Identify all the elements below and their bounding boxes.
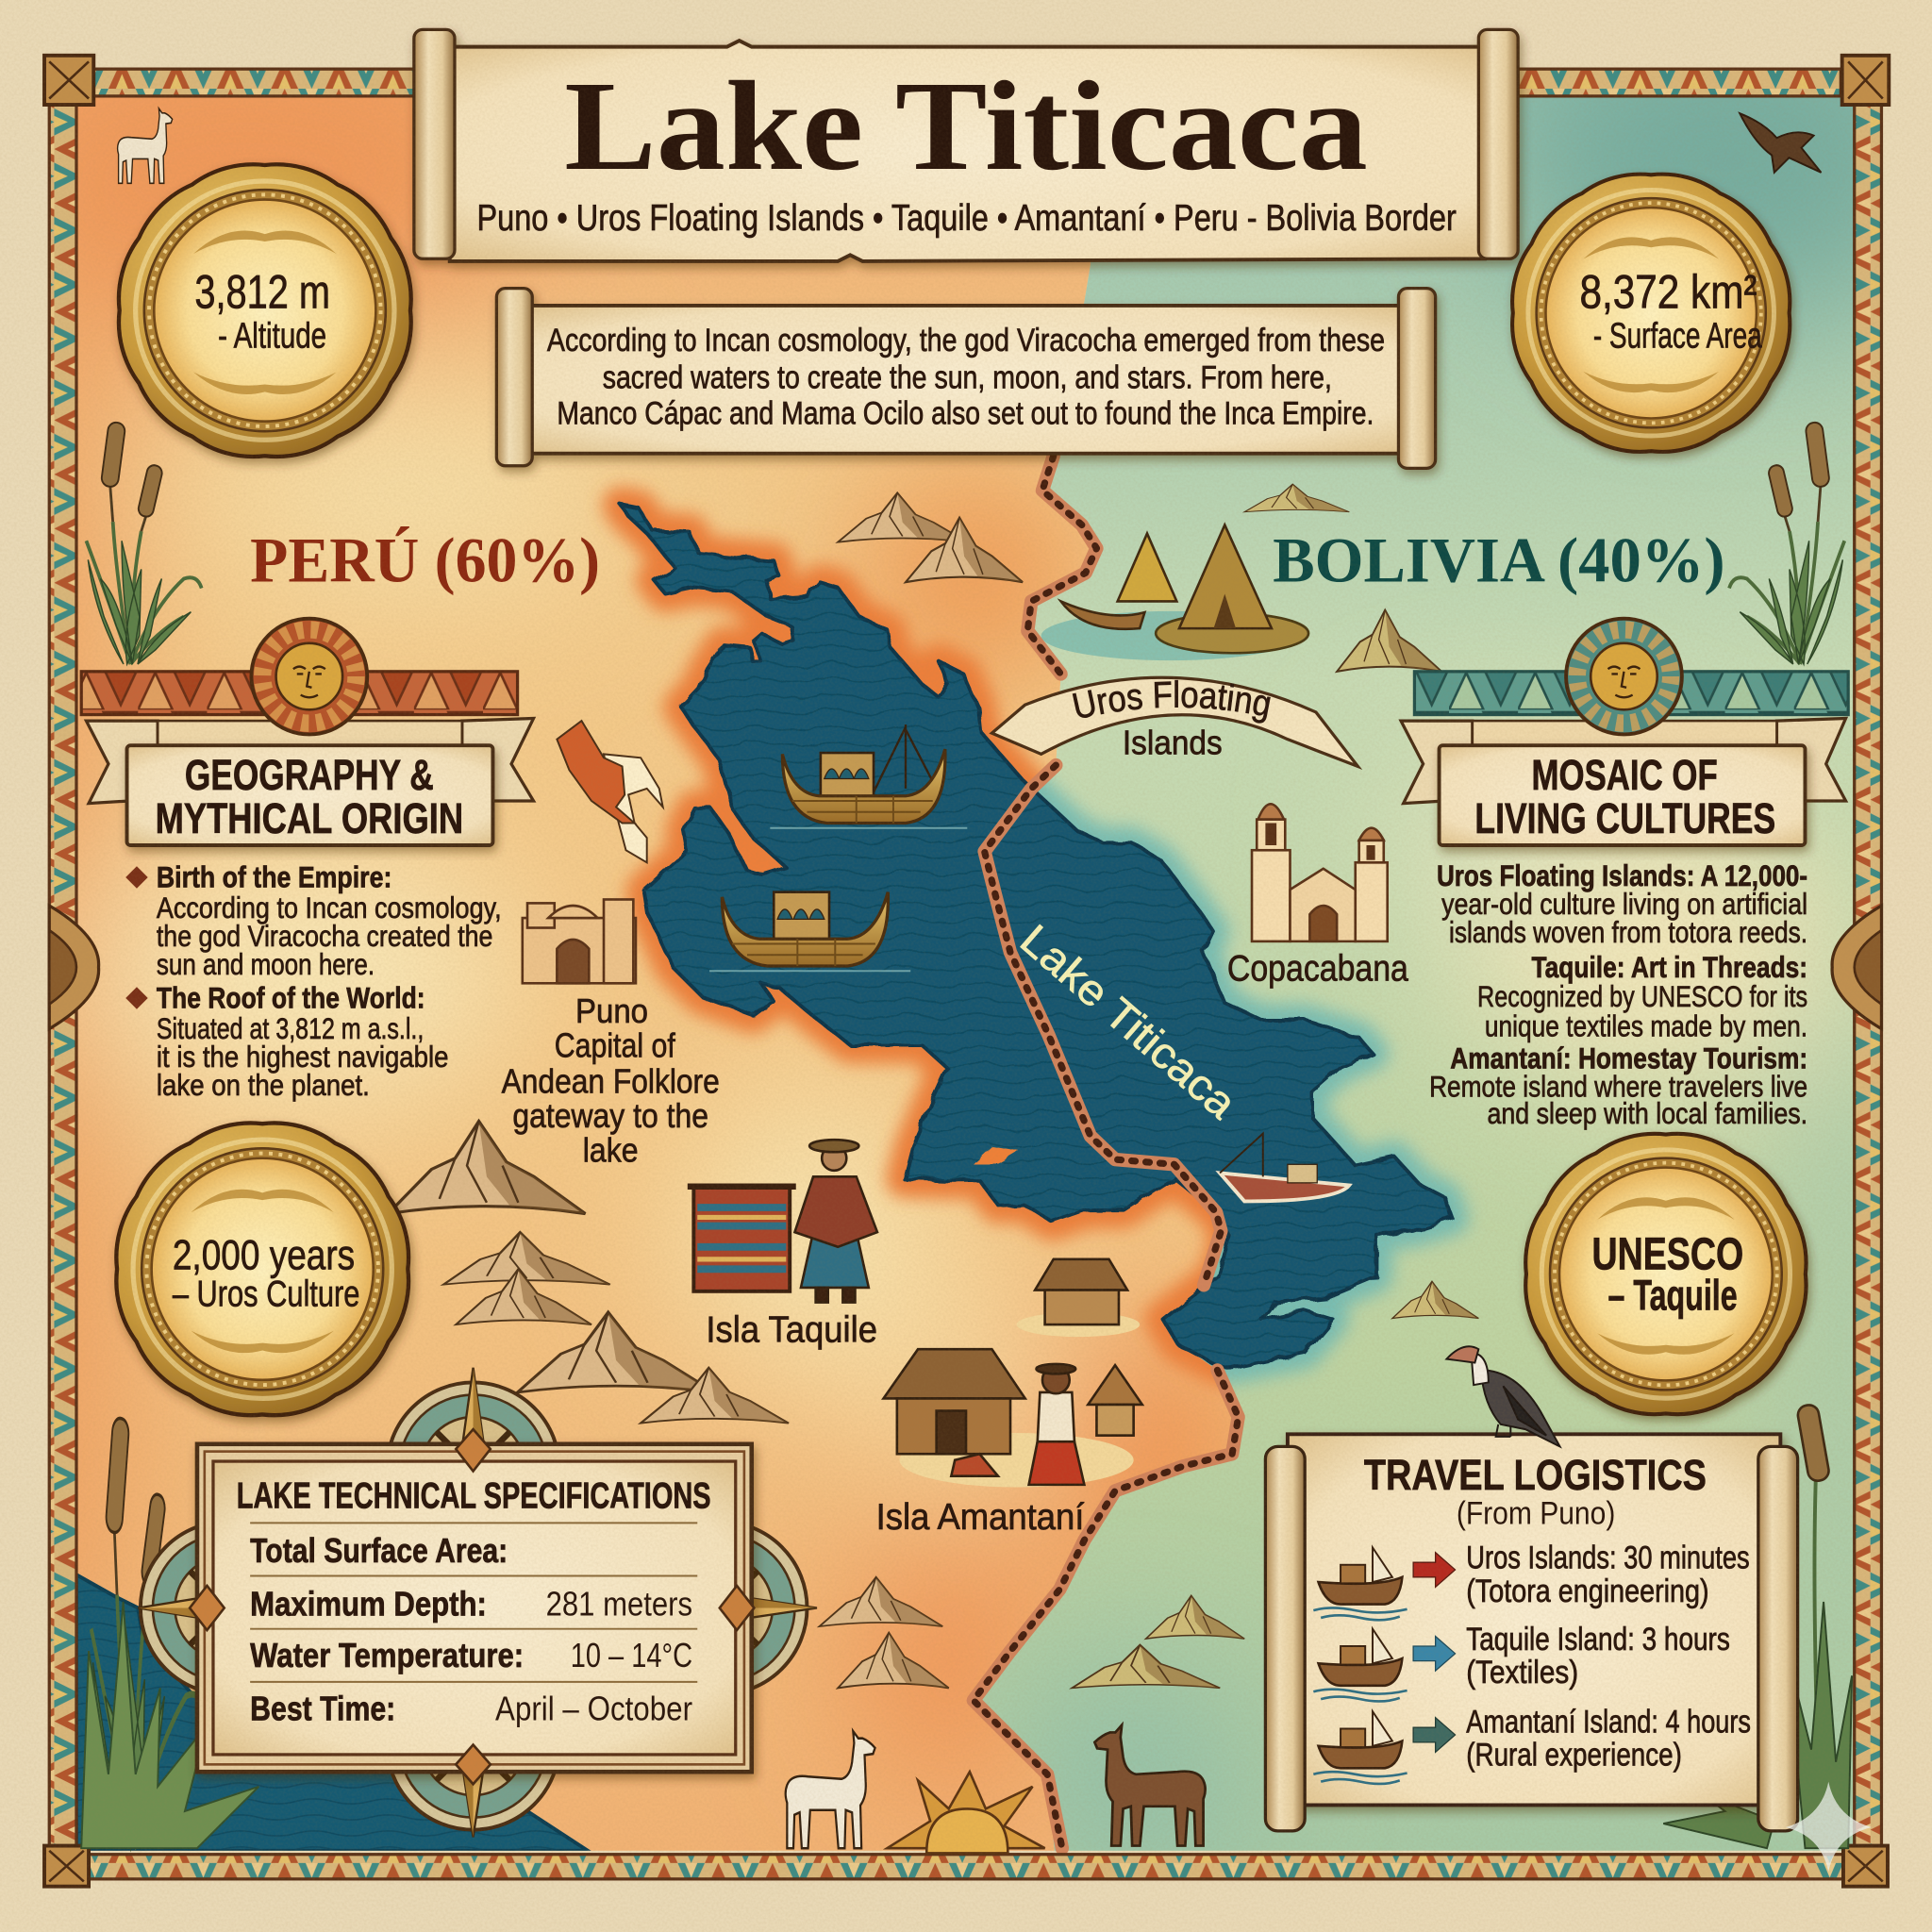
label: Puno description: Puno <box>575 991 648 1030</box>
specification rows <box>250 1531 692 1727</box>
panel header: geography <box>81 619 534 845</box>
water: southwest bay <box>76 1574 588 1851</box>
seal: surface area <box>1512 175 1790 452</box>
Peru-Bolivia dashed border <box>974 456 1239 1848</box>
icon: Taquile weaver <box>794 1140 877 1303</box>
heading: travel logistics: TRAVEL LOGISTICS <box>1364 1451 1707 1499</box>
specification rows: 281 meters <box>546 1584 692 1623</box>
subheading: (From Puno) <box>1457 1496 1615 1532</box>
icon: reed boat one <box>770 724 967 828</box>
icon: Puno colonial building <box>523 899 636 983</box>
heading line two: LIVING CULTURES <box>1474 794 1775 842</box>
label: Puno description: gateway to the <box>512 1096 708 1135</box>
text block: geography bullets: Situated at 3,812 m a.s.l., <box>157 1012 424 1045</box>
seal: Uros culture: – Uros Culture <box>173 1274 359 1314</box>
route: Amantani <box>1466 1704 1751 1774</box>
seal: UNESCO: UNESCO <box>1592 1228 1743 1279</box>
intro text <box>547 323 1385 431</box>
specification rows: 10 – 14°C <box>571 1636 692 1674</box>
icon: reed boat two <box>709 892 910 971</box>
specification rows: Total Surface Area: <box>250 1531 508 1570</box>
route: Amantani: (Rural experience) <box>1466 1738 1682 1774</box>
text block: cultures: Recognized by UNESCO for its <box>1477 980 1807 1013</box>
left roll <box>414 29 455 258</box>
ribbon: Uros Floating Islands <box>989 675 1362 770</box>
title scroll <box>414 29 1518 261</box>
route: Uros: Uros Islands: 30 minutes <box>1466 1541 1750 1576</box>
title: Lake Titicaca <box>564 56 1368 197</box>
text block: geography bullets: According to Incan cosmology, <box>157 891 502 924</box>
icon: boat to Taquile <box>1313 1629 1407 1701</box>
icon: fishing boat on lake <box>1220 1134 1349 1201</box>
label: Isla Taquile: Isla Taquile <box>706 1309 877 1350</box>
text block: geography bullets: it is the highest navigable <box>157 1041 448 1074</box>
specification rows: Best Time: <box>250 1689 395 1727</box>
icon: rising sun at the bottom <box>887 1772 1045 1853</box>
label: Puno description: Capital of <box>555 1026 675 1065</box>
route: Taquile: (Textiles) <box>1466 1655 1578 1690</box>
specification rows: April – October <box>495 1689 692 1727</box>
seal: altitude <box>119 164 411 457</box>
route: Uros <box>1466 1541 1750 1609</box>
heading: cultures: MOSAIC OF <box>1532 751 1718 799</box>
text block: cultures: and sleep with local families. <box>1487 1097 1807 1130</box>
text block: cultures: Remote island where travelers live <box>1429 1070 1807 1103</box>
heading: Bolivia: BOLIVIA (40%) <box>1273 524 1725 595</box>
reeds bottom left <box>92 1416 204 1848</box>
seal: surface area: 8,372 km² <box>1579 266 1757 319</box>
heading: geography: GEOGRAPHY & <box>185 751 434 799</box>
label: Copacabana: Copacabana <box>1227 949 1408 990</box>
icon: brown llama <box>1094 1725 1206 1846</box>
right roll <box>1478 29 1518 258</box>
label: Puno description: lake <box>583 1131 639 1170</box>
seal: UNESCO: – Taquile <box>1607 1271 1738 1319</box>
lake water <box>621 506 1453 1368</box>
icon: corner watermark star <box>1786 1782 1872 1872</box>
subtitle: Puno • Uros Floating Islands • Taquile • Amantaní • Peru - Bolivia Border <box>476 198 1457 239</box>
icon: textile loom <box>688 1187 796 1291</box>
text block: geography bullets: sun and moon here. <box>157 948 375 981</box>
text block: geography bullets: lake on the planet. <box>157 1069 370 1102</box>
reeds right <box>1729 422 1844 664</box>
land: Bolivia <box>982 98 1853 1851</box>
icon: boat to Uros <box>1313 1547 1407 1620</box>
mountains <box>388 492 1023 1688</box>
text block: cultures: Taquile: Art in Threads: <box>1532 951 1807 984</box>
intro text: sacred waters to create the sun, moon, and stars. From here, <box>603 359 1332 395</box>
arrow: red <box>1413 1553 1456 1587</box>
icon: boat to Amantani <box>1313 1711 1407 1784</box>
seal: surface area: - Surface Area <box>1593 316 1762 356</box>
icon: Copacabana church <box>1252 804 1388 941</box>
intro scroll <box>496 289 1436 468</box>
heading: Peru: PERÚ (60%) <box>250 524 600 595</box>
seal: altitude: 3,812 m <box>194 266 330 319</box>
label: Islands: Islands <box>1123 723 1223 761</box>
specification rows: Water Temperature: <box>250 1636 524 1674</box>
compass roses behind specifications <box>138 1368 817 1837</box>
text block: geography bullets: the god Viracocha created the <box>157 920 492 953</box>
land: Peru <box>77 98 1232 1851</box>
text block: geography bullets <box>125 860 502 1102</box>
specification rows: Maximum Depth: <box>250 1584 487 1623</box>
panel: lake technical specifications <box>190 1429 754 1784</box>
text block: geography bullets: The Roof of the World: <box>157 981 425 1014</box>
icon: white llama <box>786 1731 875 1848</box>
icon: Uros reed huts <box>1041 525 1308 660</box>
text block: cultures <box>1429 859 1807 1130</box>
intro text: Manco Cápac and Mama Ocilo also set out to found the Inca Empire. <box>557 395 1374 431</box>
panel: travel logistics <box>1265 1434 1798 1831</box>
arrow: teal <box>1413 1718 1456 1752</box>
icon: llama top left <box>118 108 173 183</box>
arrow: blue <box>1413 1637 1456 1671</box>
route: Uros: (Totora engineering) <box>1466 1574 1709 1609</box>
text block: geography bullets: Birth of the Empire: <box>157 860 391 893</box>
scroll body <box>450 41 1485 261</box>
seal: altitude: - Altitude <box>218 316 326 356</box>
lake coastal halo <box>621 506 1453 1368</box>
route: Amantani: Amantaní Island: 4 hours <box>1466 1704 1751 1740</box>
label: Uros Floating: Uros Floating <box>1072 679 1271 724</box>
text block: cultures: Uros Floating Islands: A 12,000- <box>1437 859 1807 892</box>
icon: mini map of Peru <box>557 721 663 862</box>
seal: Uros culture: 2,000 years <box>173 1232 355 1278</box>
seal: Uros culture <box>116 1123 408 1415</box>
route: Taquile: Taquile Island: 3 hours <box>1466 1622 1730 1657</box>
text block: cultures: year-old culture living on artificial <box>1441 888 1807 921</box>
island <box>973 1146 1019 1163</box>
heading line two: MYTHICAL ORIGIN <box>156 794 463 842</box>
reeds bottom right <box>1663 1404 1852 1848</box>
label: Puno description: Andean Folklore <box>502 1062 720 1101</box>
icon: condor <box>1446 1346 1560 1446</box>
text block: cultures: Amantaní: Homestay Tourism: <box>1450 1041 1807 1074</box>
grass bottom left <box>81 1602 258 1848</box>
label: Isla Amantani: Isla Amantaní <box>876 1497 1084 1538</box>
mountains Bolivia <box>1072 484 1478 1688</box>
icon: bird top right <box>1740 113 1821 173</box>
panel header: cultures <box>1401 619 1848 845</box>
label: Puno description <box>502 991 720 1170</box>
route: Taquile <box>1466 1622 1730 1690</box>
heading: specifications: LAKE TECHNICAL SPECIFICATIONS <box>237 1476 711 1517</box>
intro text: According to Incan cosmology, the god Viracocha emerged from these <box>547 323 1385 358</box>
label: Lake Titicaca on the map: Lake Titicaca <box>1011 915 1246 1128</box>
text block: cultures: islands woven from totora reeds. <box>1449 916 1807 949</box>
text block: cultures: unique textiles made by men. <box>1485 1009 1807 1042</box>
seal: UNESCO <box>1525 1134 1807 1414</box>
icon: Amantani village <box>883 1259 1142 1487</box>
reeds left <box>86 422 202 664</box>
